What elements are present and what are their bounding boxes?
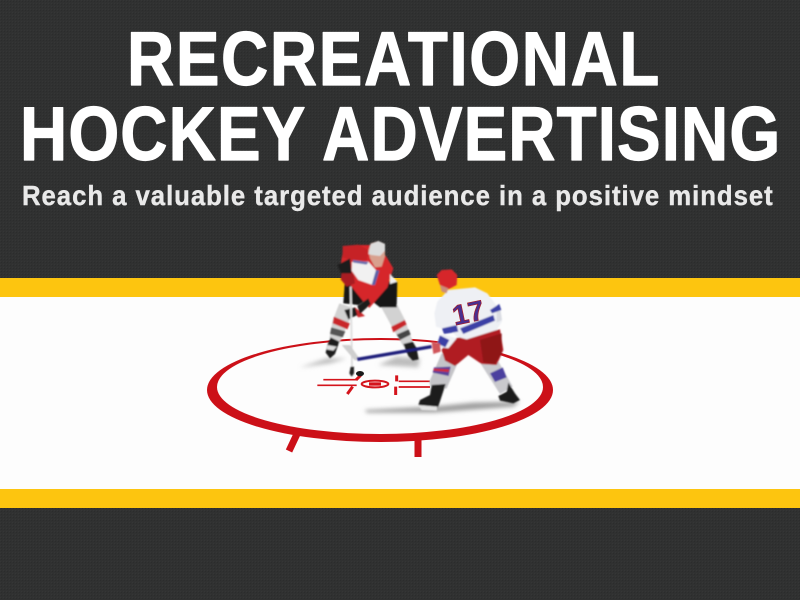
- hockey players illustration (zoomed coordinates): [300, 241, 520, 413]
- title: [20, 17, 780, 177]
- pants: [442, 329, 503, 366]
- puck: [356, 371, 364, 376]
- header background: [0, 0, 800, 278]
- bottom yellow stripe: [0, 489, 800, 508]
- skates: [326, 337, 339, 358]
- ice shadows: [300, 357, 520, 413]
- skates: [418, 384, 446, 410]
- arm and glove: [352, 307, 365, 317]
- subtitle: Reach a valuable targeted audience in a positive mindset: [22, 180, 773, 211]
- body jersey: [340, 245, 393, 308]
- helmet: [368, 241, 385, 267]
- sleeve and glove: [435, 334, 457, 348]
- face-off dot and marks: [317, 375, 430, 395]
- left leg: [329, 303, 355, 343]
- title: HOCKEY ADVERTISING: [20, 92, 780, 177]
- player: white jersey number 17: [357, 269, 520, 411]
- shorts: [343, 279, 397, 307]
- ice panel: [0, 297, 800, 489]
- player: red jersey: [326, 241, 419, 377]
- far leg: [478, 358, 513, 394]
- top yellow stripe: [0, 278, 800, 297]
- face-off circle: [207, 338, 553, 457]
- stick: [348, 287, 355, 343]
- footer background: [0, 508, 800, 600]
- jersey: [434, 287, 502, 339]
- right leg: [380, 305, 414, 347]
- stick: [357, 347, 432, 359]
- helmet: [437, 269, 457, 289]
- stripes on sleeve: [460, 315, 495, 334]
- title: RECREATIONAL: [127, 17, 659, 102]
- near leg: [429, 353, 458, 391]
- jersey number 17: 17: [449, 294, 487, 331]
